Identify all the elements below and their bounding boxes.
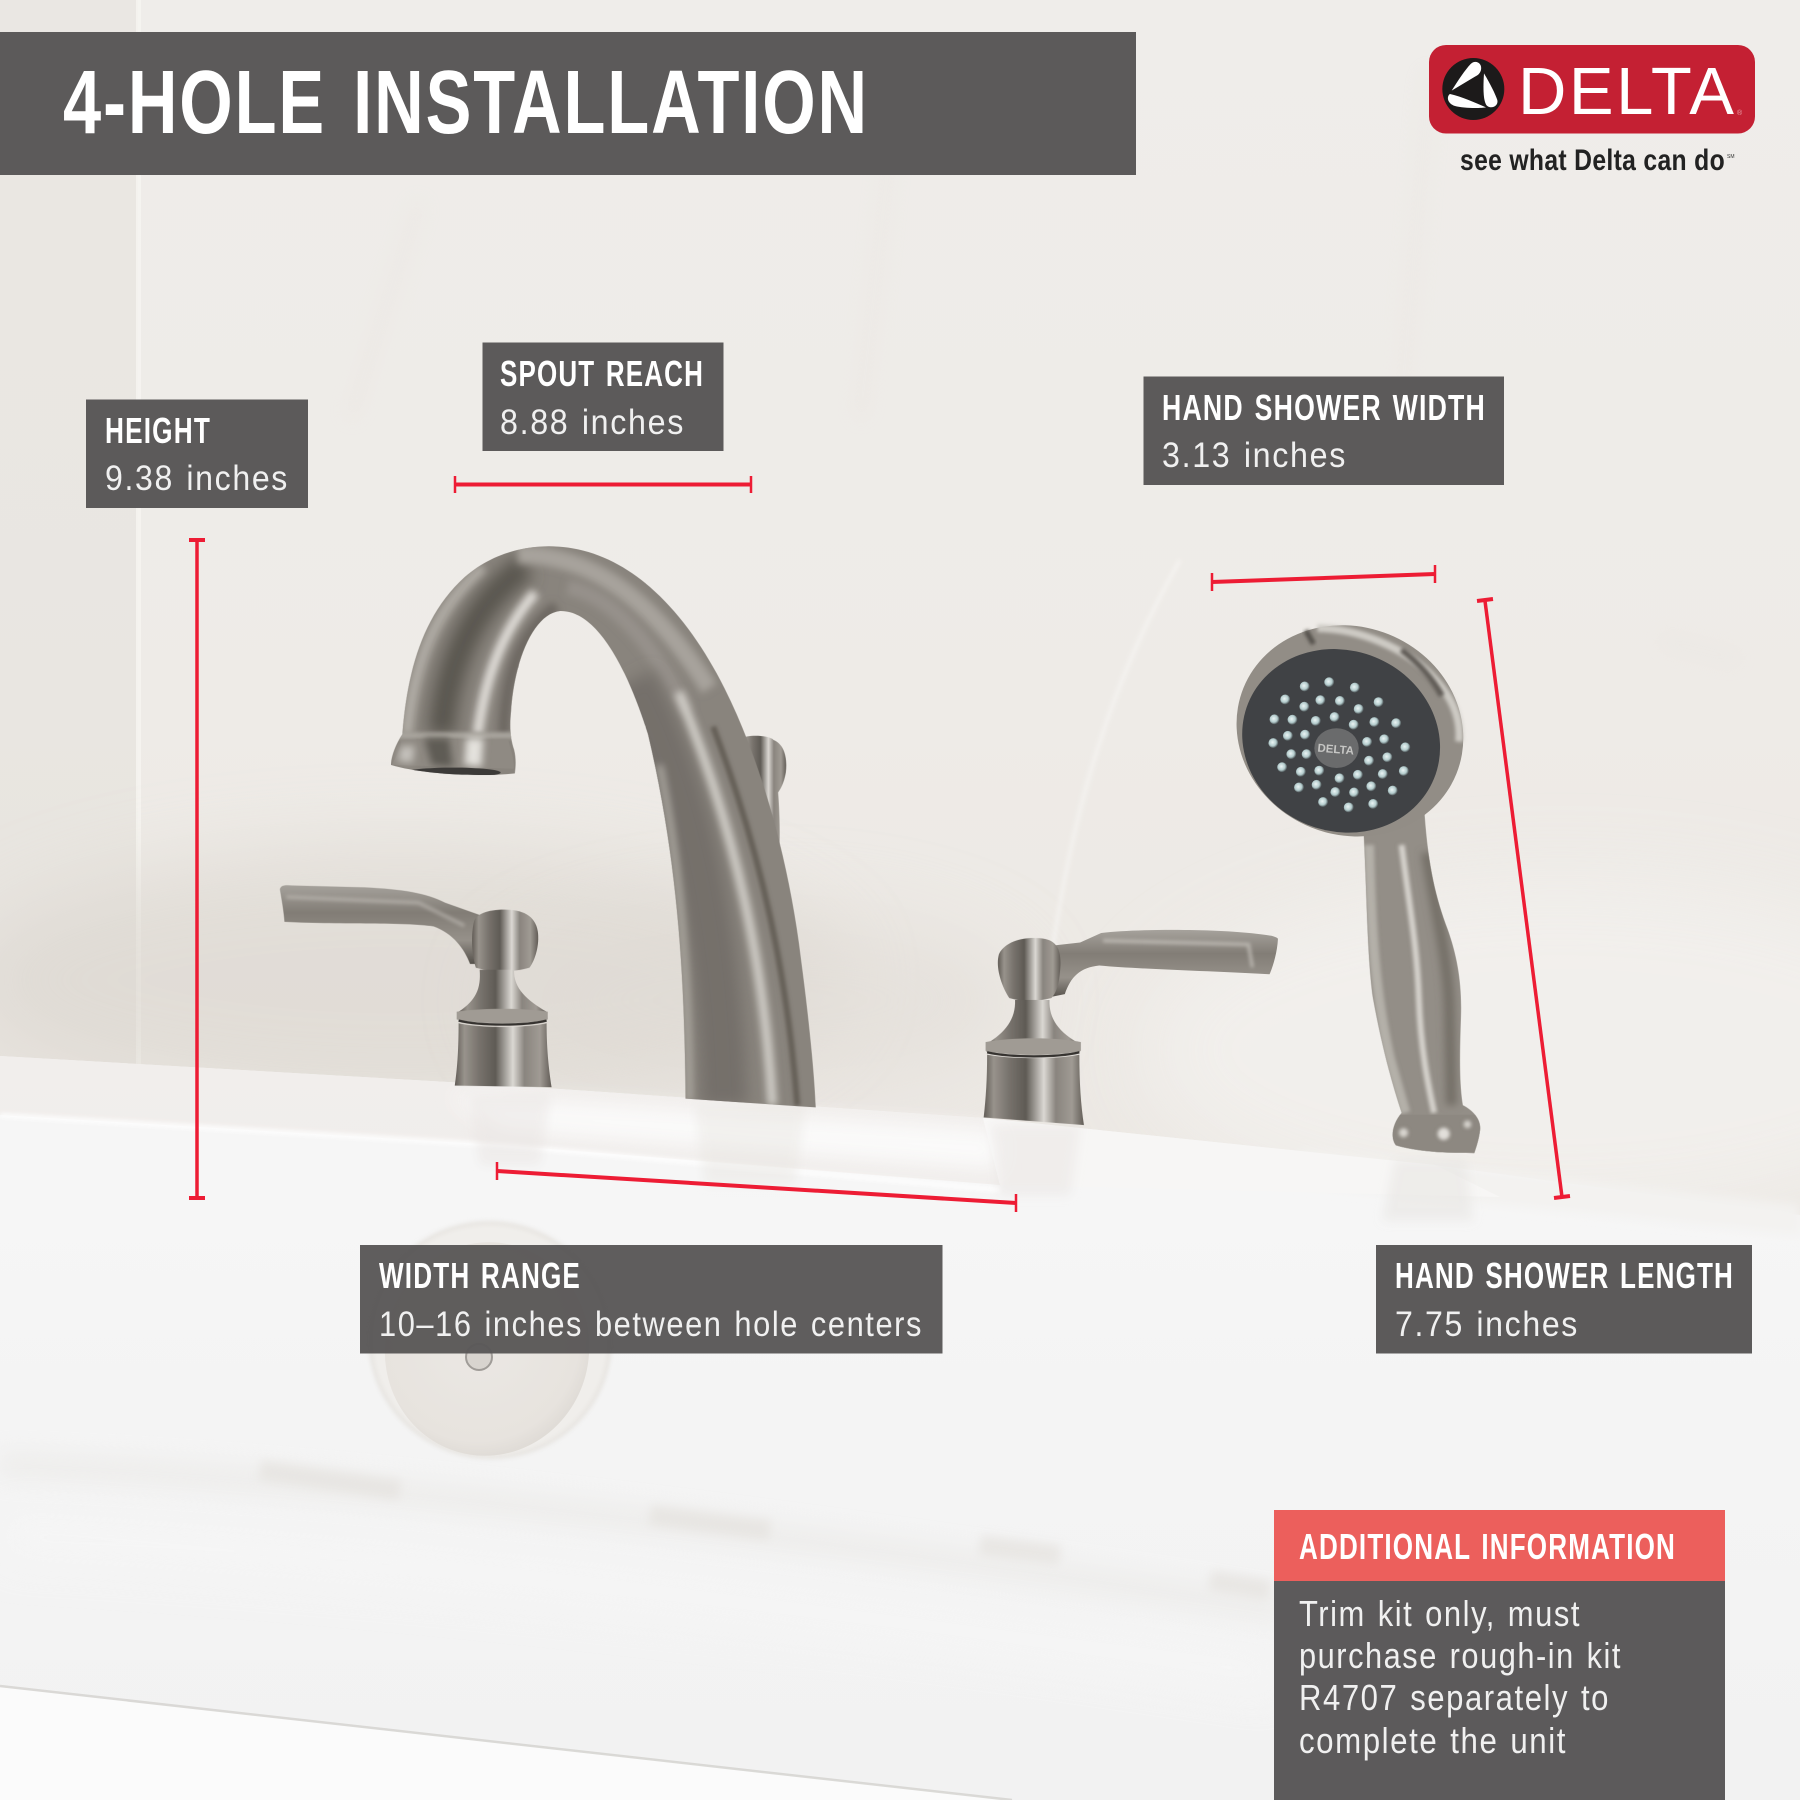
- dimension line: height: [189, 539, 205, 1199]
- left lever handle: [280, 885, 552, 1087]
- additional information body: purchase rough-in kit: [1299, 1635, 1622, 1676]
- label: hand shower width: 3.13 inches: [1162, 436, 1347, 475]
- label: spout reach: 8.88 inches: [500, 403, 685, 442]
- dimension line: hand shower width: [1212, 565, 1435, 591]
- label: hand shower length: 7.75 inches: [1395, 1305, 1579, 1344]
- title banner: [0, 32, 1136, 175]
- hand shower head rim: [1204, 591, 1495, 870]
- Delta logo: [1429, 45, 1755, 177]
- label: hand shower length: [1376, 1245, 1752, 1354]
- additional information body: [1274, 1581, 1725, 1800]
- additional information body: Trim kit only, must: [1299, 1593, 1581, 1634]
- panel: additional information: [1274, 1510, 1725, 1800]
- spout body: [388, 546, 816, 1107]
- additional information heading: [1274, 1510, 1725, 1581]
- Delta logo: see what Delta can do: [1460, 144, 1725, 177]
- label: spout reach: SPOUT REACH: [500, 353, 704, 394]
- Delta logo: DELTA: [1518, 54, 1734, 129]
- label: height: 9.38 inches: [105, 459, 289, 498]
- hand shower spray face: DELTA: [1317, 743, 1354, 758]
- label: hand shower width: HAND SHOWER WIDTH: [1162, 387, 1486, 428]
- label: hand shower width: [1144, 376, 1504, 485]
- faucet spout and rear diverter: [388, 546, 816, 1107]
- label: height: HEIGHT: [105, 410, 211, 451]
- hand shower handle: [1363, 814, 1482, 1153]
- Delta logo: ®: [1737, 109, 1743, 117]
- label: width range: 10–16 inches between hole centers: [379, 1305, 923, 1344]
- additional information body: complete the unit: [1299, 1720, 1567, 1761]
- logo icon: [1442, 58, 1504, 120]
- diverter knob behind spout: [742, 736, 786, 857]
- label: width range: [360, 1245, 942, 1354]
- hand shower spray face: [1214, 620, 1468, 862]
- label: height: [86, 400, 308, 508]
- Delta logo: SM: [1727, 154, 1734, 160]
- hand shower: [1236, 623, 1480, 1154]
- bathtub: [0, 1056, 1800, 1800]
- additional information body: R4707 separately to: [1299, 1677, 1610, 1718]
- title banner: 4-HOLE INSTALLATION: [63, 53, 869, 153]
- dimension line: spout reach: [455, 476, 751, 493]
- background: tiled wall: [0, 0, 1800, 1300]
- dimension line: width range: [497, 1162, 1016, 1212]
- overflow plate: [352, 1204, 628, 1476]
- right lever handle: [984, 930, 1278, 1125]
- label: spout reach: [482, 342, 724, 451]
- dimension line: hand shower length: [1477, 599, 1570, 1198]
- label: width range: WIDTH RANGE: [379, 1255, 581, 1296]
